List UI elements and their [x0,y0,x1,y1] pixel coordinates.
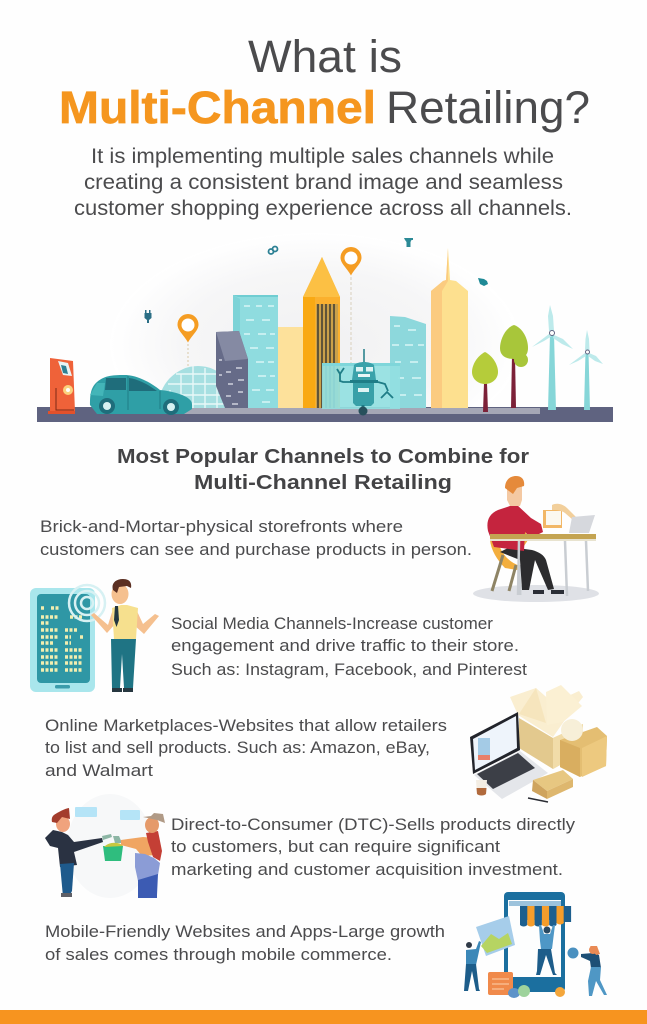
head [507,486,522,506]
text: brick-and-mortar [40,517,472,559]
floor shadow [473,585,599,602]
illustration: man at desk [473,476,599,602]
text: social media: Such as: Instagram, Facebook, and Pinterest [171,660,527,679]
road [37,407,613,422]
phone [30,588,95,692]
text: direct to consumer: marketing and customer acquisition investment. [171,860,563,879]
box right [560,719,607,777]
text: mobile friendly: Mobile-Friendly Websites and Apps-Large growth [45,922,445,941]
text: direct to consumer: to customers, but can require significant [171,837,500,856]
car [90,375,192,415]
shirt [112,605,138,639]
torso [487,504,543,551]
buyer hair [52,808,70,823]
location pin left [178,314,198,366]
section heading: Multi-Channel Retailing [194,471,452,494]
text: social media: engagement and drive traffic to their store. [171,636,519,655]
laptop screen [470,712,520,774]
illustration: laptop and boxes [470,685,607,802]
buyer shoes [61,893,72,897]
buyer jacket [45,830,103,867]
screen [37,594,90,683]
wind turbine small [569,330,603,410]
yellow building [278,327,304,408]
tree large [500,325,528,408]
tie [114,606,119,627]
shoes [112,688,133,692]
intro text [74,145,572,220]
speech bubbles [75,807,140,820]
laptop base [474,751,548,799]
hands with money [102,834,122,843]
box small [532,770,573,799]
buyer face [56,816,70,832]
seller hat [143,813,165,823]
chair [490,526,528,595]
location pin centre [340,247,362,363]
title: What is [248,31,402,82]
section heading [117,445,529,494]
hair [505,476,524,494]
basket [103,846,123,861]
head [112,584,128,604]
wind turbine large [532,305,573,410]
illustration: phone and man [30,579,159,692]
backdrop [67,794,153,898]
tall cream tower [431,248,468,408]
shopping box [543,510,562,528]
text: direct to consumer: Direct-to-Consumer (DTC)-Sells products directly [171,815,576,834]
awning [520,906,571,926]
intro text: It is implementing multiple sales channels while [91,145,554,168]
screen product [478,738,490,760]
seller head [145,817,159,833]
shop figure [536,925,557,975]
shoes [533,590,564,594]
robot [337,349,393,416]
icon: bird [478,278,488,286]
basket goods [104,843,123,847]
orange tower [303,257,340,408]
text: mobile friendly: of sales comes through mobile commerce. [45,945,392,964]
text: online marketplaces: and Walmart [45,761,153,780]
screen dots [41,608,83,670]
section heading: Most Popular Channels to Combine for [117,445,529,468]
city illustration [37,238,613,422]
coffee cup [476,780,487,796]
icon: link [268,246,278,254]
text: online marketplaces: Online Marketplaces-Websites that allow retailers [45,716,447,735]
footer bar [0,1010,647,1024]
text: social media [171,614,527,679]
text: brick-and-mortar: customers can see and purchase products in person. [40,540,472,559]
title [59,31,590,133]
legs [500,547,554,590]
robot panel [322,363,400,409]
illustration: mobile storefront [464,892,607,998]
text: social media: Social Media Channels-Increase customer [171,614,493,633]
illustration: buyer and seller [45,794,165,898]
dome [158,366,238,408]
buyer jeans [60,863,74,897]
seller vest [146,831,162,861]
signal circles [69,585,105,621]
open box [510,685,583,769]
pen [528,798,548,802]
orange card [488,972,513,995]
icon: bulb [404,238,413,247]
title: Multi-Channel [59,82,376,133]
cyan building [233,295,278,408]
intro text: customer shopping experience across all channels. [74,197,572,220]
dark building [216,331,248,408]
text: online marketplaces [45,716,447,780]
woman figure [568,946,607,996]
chat bubbles [508,985,565,998]
phone [504,892,565,992]
phone screen [508,900,561,977]
desk [490,534,596,596]
blue building right [390,316,426,408]
arm [552,504,576,520]
text: online marketplaces: to list and sell products. Such as: Amazon, eBay, [45,738,430,757]
seller overalls [135,853,160,881]
hair [112,579,131,593]
laptop [569,515,595,533]
left figure [464,941,481,991]
seller lower legs [138,874,158,898]
picture card [476,916,515,956]
phone button [55,685,70,688]
text: mobile friendly [45,922,445,964]
intro text: creating a consistent brand image and seamless [84,171,563,194]
tree small [472,352,498,412]
icon: plug [144,310,152,323]
text: direct to consumer [171,815,576,879]
seller arm and shirt [121,837,156,856]
trousers [111,639,136,688]
icon: charging pump [48,358,75,414]
title: Retailing? [386,82,590,133]
text: brick-and-mortar: Brick-and-Mortar-physical storefronts where [40,517,403,536]
browser bar [509,901,561,906]
arms [91,609,159,634]
